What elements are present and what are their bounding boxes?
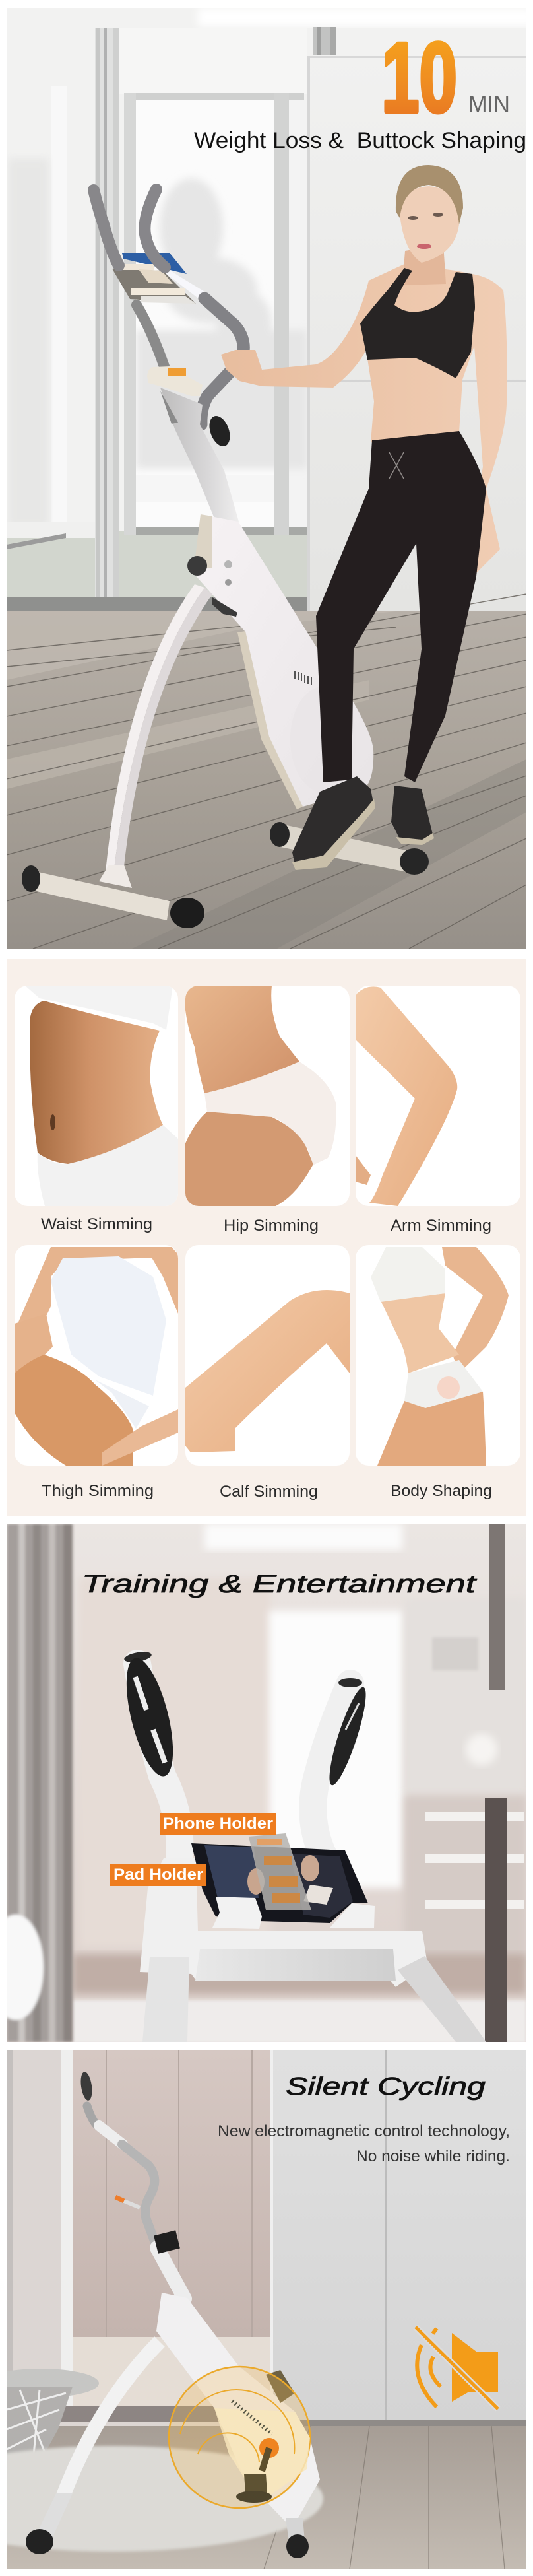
console (147, 366, 203, 396)
front leg (106, 584, 204, 875)
heading: 10 MIN: MIN (468, 90, 510, 118)
bike (22, 189, 429, 928)
sports bra (360, 268, 475, 378)
subheading: Weight Loss & Buttock Shaping (194, 128, 526, 153)
panel: slimming areas (7, 959, 526, 1516)
heading: Training & Entertainment (82, 1571, 477, 1598)
panel: hero photo with bike and woman (7, 8, 533, 949)
pivot joint (187, 556, 207, 576)
neck and head (404, 250, 446, 285)
label: Hip Simming (224, 1217, 319, 1235)
upper pedal (266, 2370, 295, 2403)
callout: phone holder (160, 1813, 276, 1835)
feet (26, 2493, 309, 2558)
card: thigh (15, 1245, 178, 1466)
rear foot bar (270, 822, 429, 875)
handlebars (94, 189, 243, 424)
card: body (356, 1245, 520, 1466)
flywheel body (194, 514, 373, 807)
arms and torso (221, 264, 507, 578)
description text: No noise while riding. (356, 2148, 510, 2165)
label: Thigh Simming (42, 1482, 154, 1500)
card: calf (185, 1245, 350, 1466)
holder clips (212, 1897, 375, 1929)
adjustment knob (210, 416, 230, 446)
tablet (191, 1833, 368, 1923)
top grip (79, 2071, 94, 2101)
seat-tube knob (154, 2230, 180, 2254)
phone (249, 1833, 311, 1910)
callout: pad holder: Pad Holder (113, 1866, 203, 1883)
icon: muted speaker (416, 2327, 498, 2409)
vents (295, 671, 311, 685)
device tray (112, 253, 206, 304)
card: waist (15, 986, 178, 1206)
shoe left (292, 776, 375, 870)
heading: 10 MIN: 10 (381, 22, 457, 133)
rug (0, 2446, 323, 2552)
panel: silent cycling (0, 2050, 526, 2569)
description text (218, 2122, 510, 2165)
label: Body Shaping (391, 1482, 492, 1500)
pillars (485, 1524, 507, 2042)
callout: phone holder: Phone Holder (163, 1815, 273, 1833)
callout: pad holder (110, 1864, 206, 1886)
heading: 10 MIN (384, 40, 508, 115)
room background (7, 2050, 526, 2569)
right grip (329, 1678, 366, 1785)
handle bars (137, 1664, 350, 1855)
shoe right (391, 786, 434, 845)
frame body (156, 2293, 320, 2528)
orange lever (115, 2197, 124, 2201)
tray body (140, 1858, 486, 2042)
panel: training and entertainment (0, 1524, 526, 2043)
description text: New electromagnetic control technology, (218, 2122, 510, 2140)
woman (221, 165, 507, 870)
front foot bar (22, 865, 204, 928)
handlebar (87, 2106, 185, 2299)
leggings (316, 431, 486, 782)
label: Calf Simming (220, 1483, 318, 1501)
wooden floor (7, 594, 526, 949)
basket (0, 2369, 99, 2472)
bike (26, 2071, 320, 2558)
floor (7, 2426, 526, 2569)
label: Arm Simming (391, 1217, 491, 1235)
card: hip (185, 986, 350, 1206)
blurred room background (7, 1524, 526, 2043)
room background (7, 8, 533, 612)
heading: Silent Cycling (286, 2073, 486, 2101)
lace detail (389, 452, 404, 479)
crank and pedal (236, 2438, 279, 2503)
left grip (124, 1652, 173, 1776)
curtain (0, 1524, 73, 2042)
label: Waist Simming (41, 1215, 152, 1233)
main post (160, 388, 239, 522)
highlight circle (169, 2367, 310, 2508)
front leg (63, 2342, 160, 2495)
card: arm (356, 986, 520, 1206)
